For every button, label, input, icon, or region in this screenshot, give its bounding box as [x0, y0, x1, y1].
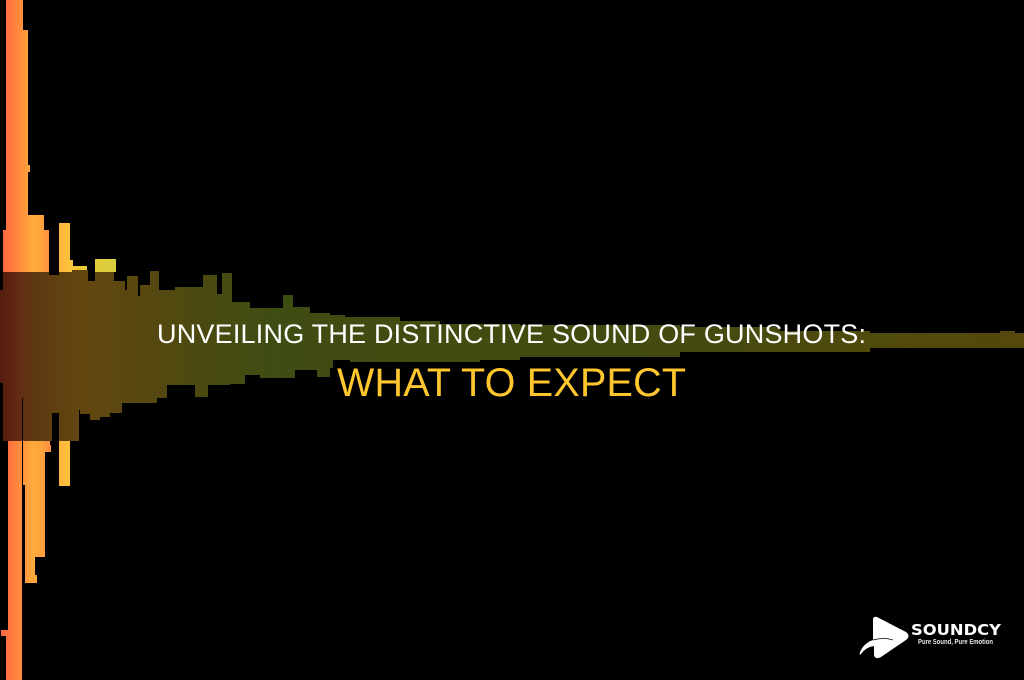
title: [157, 319, 866, 405]
logo tagline: Pure Sound, Pure Emotion: [918, 637, 993, 646]
icon: play-shaped swoosh: [860, 617, 908, 658]
title line 1: UNVEILING THE DISTINCTIVE SOUND OF GUNSHOTS:: [157, 319, 866, 349]
logo name: SOUNDCY: [911, 621, 1002, 639]
icon: swoosh cut line: [873, 638, 893, 640]
logo: Soundcy: [860, 617, 1002, 658]
waveform: bright bars above band: [3, 0, 116, 272]
waveform: bright bars below band: [1, 441, 70, 680]
title line 2: WHAT TO EXPECT: [337, 361, 686, 405]
waveform: dark centre band: [0, 270, 1024, 441]
waveform: thin dark gap: [22, 398, 23, 680]
